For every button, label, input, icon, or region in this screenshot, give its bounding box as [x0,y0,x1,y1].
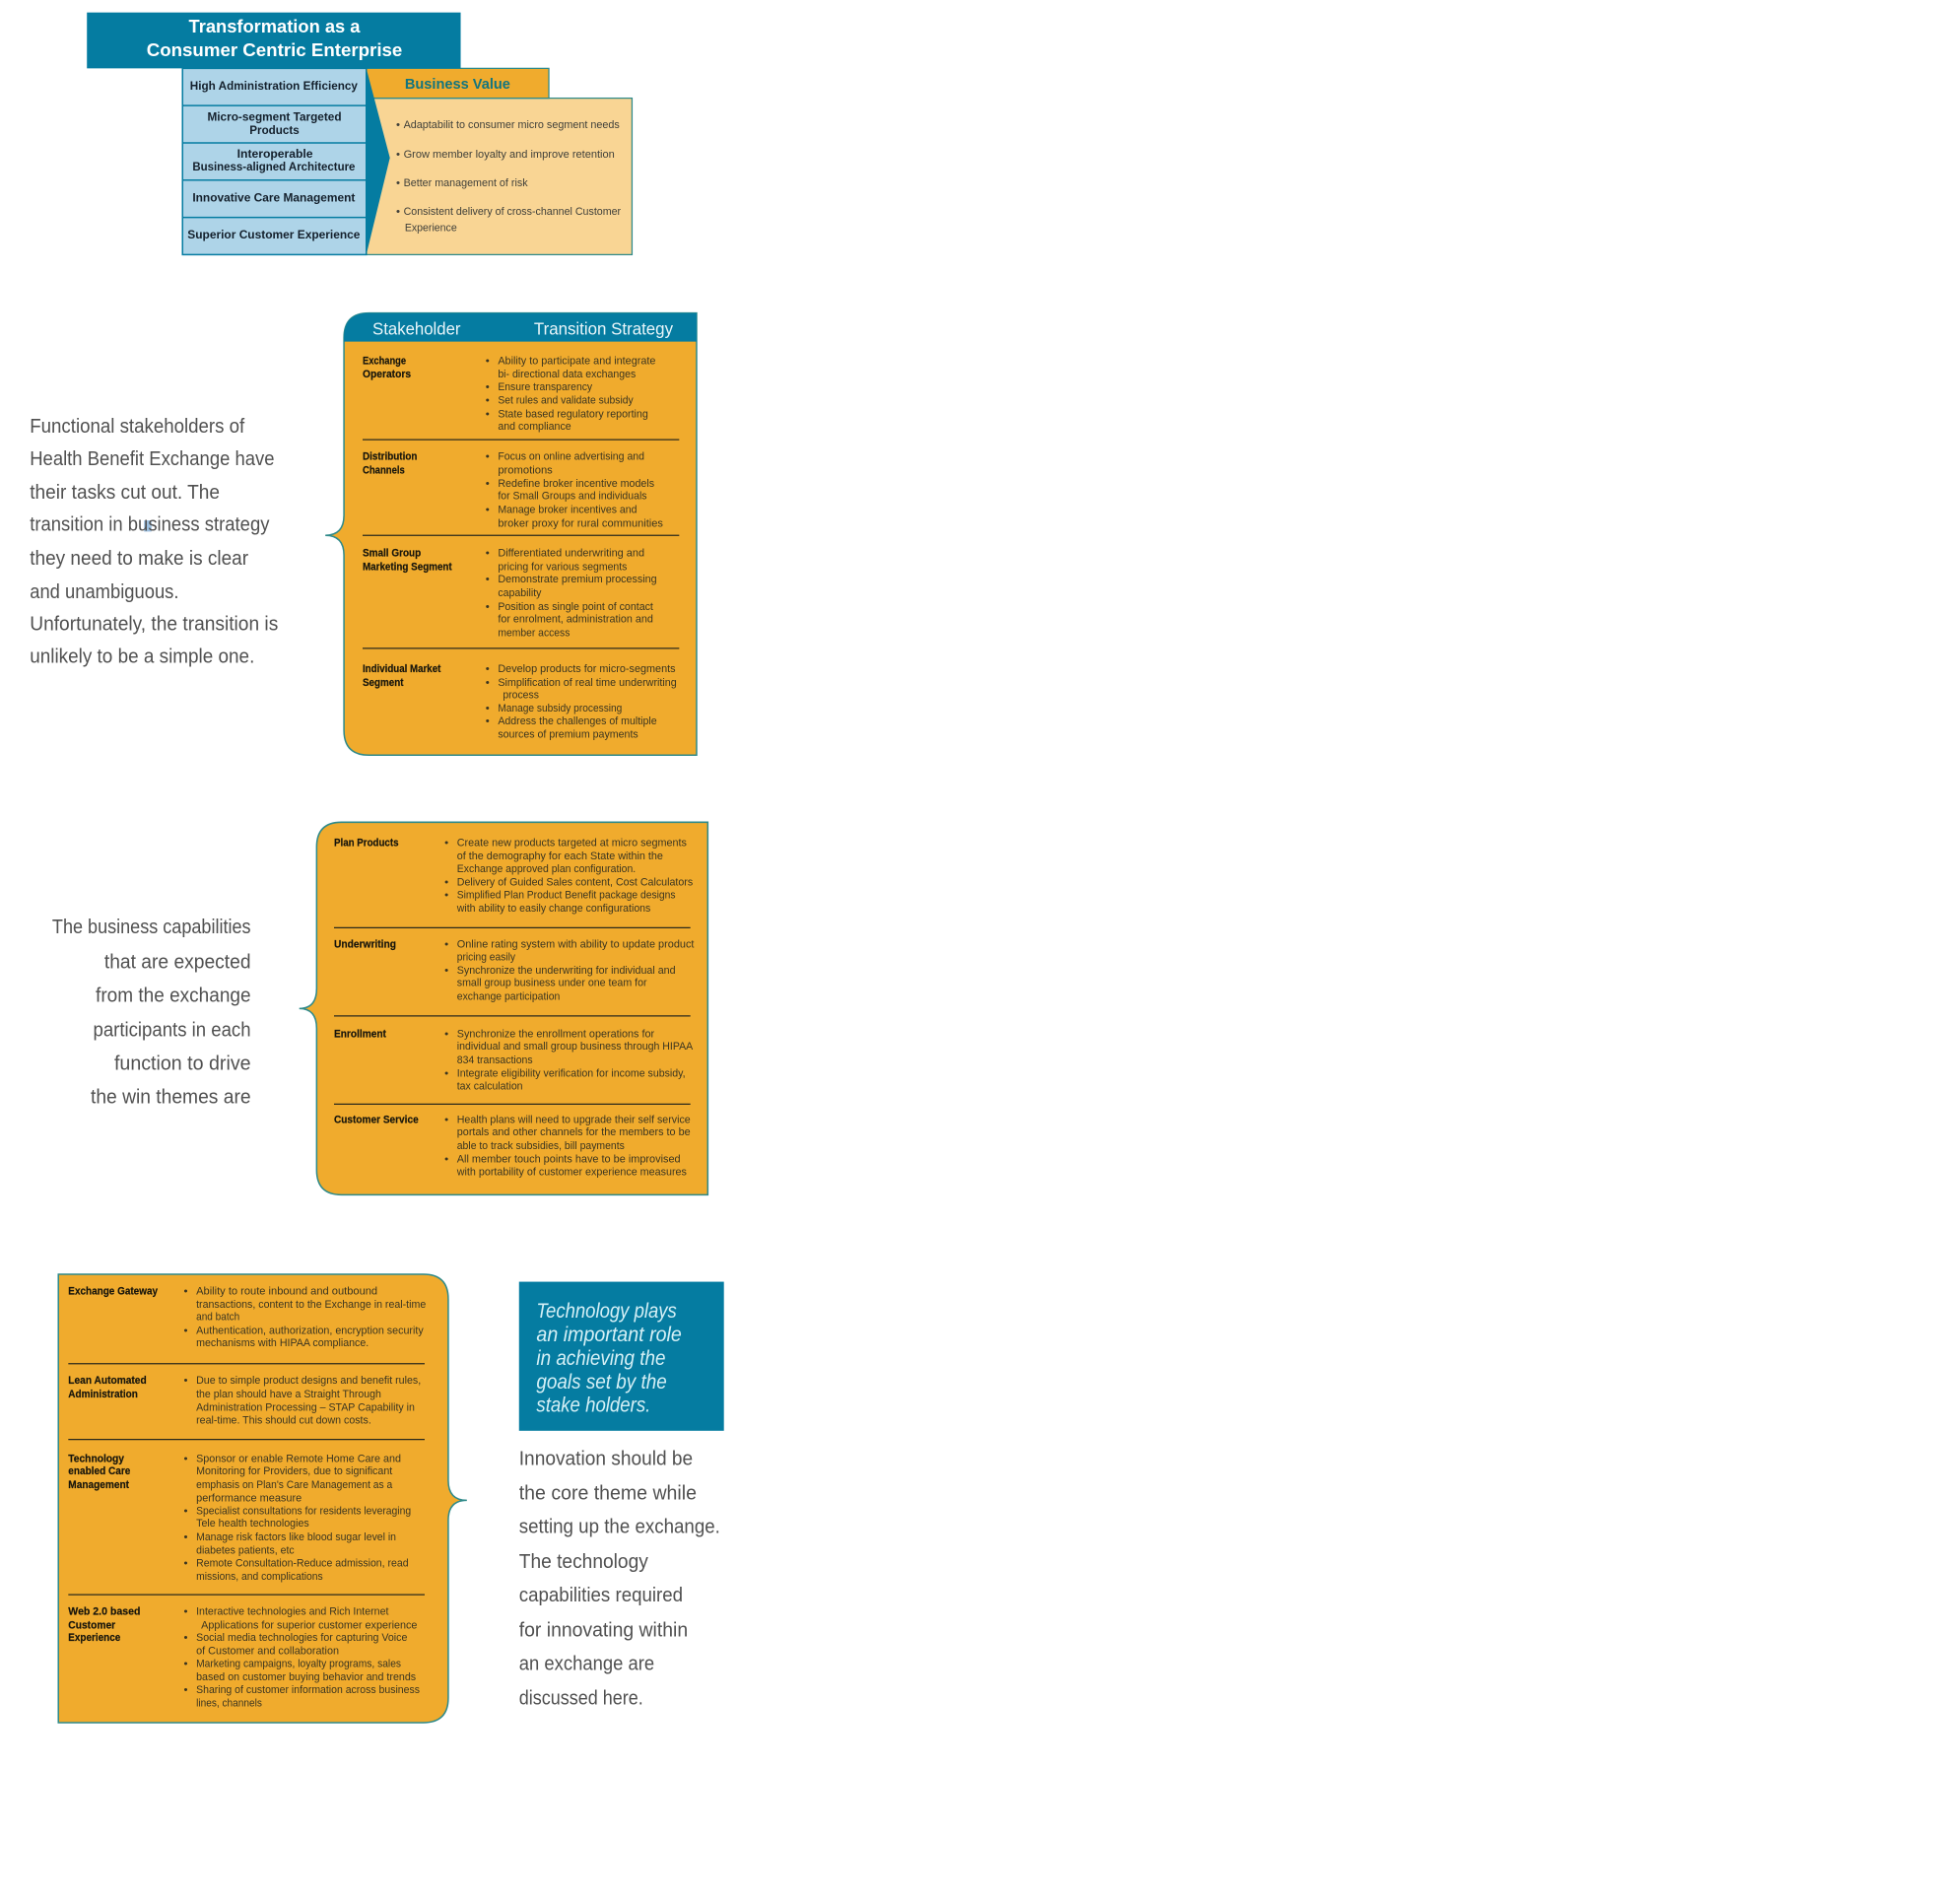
row: plan products: Plan Products [334,837,399,849]
row: technology enabled care management: • [184,1453,188,1464]
row: exchange gateway: Ability to route inbound and outbound [196,1285,377,1297]
row: underwriting: Online rating system with ability to update product [457,939,695,951]
callout: technology plays an important role [519,1282,724,1431]
row: web 2.0 based customer experience: of Customer and collaboration [196,1646,339,1658]
table header: Transition Strategy [534,319,673,339]
row: distribution channels: Channels [363,464,405,476]
row: lean automated administration: • [184,1375,188,1387]
panel: business capabilities by function [300,822,707,1194]
panel: business value content: Consistent delivery of cross-channel Customer [404,206,621,218]
heading: business value: Business Value [405,76,510,93]
arrow: capabilities to value [367,68,390,254]
row: small group marketing segment: • [486,574,490,585]
row: lean automated administration: Administration [68,1389,138,1400]
callout: technology plays an important role: Technology plays [536,1300,677,1323]
panel: technology capabilities [58,1274,467,1723]
row: individual market segment: • [486,677,490,689]
row: technology enabled care management: enabled Care [68,1465,130,1477]
panel: business value content: • [396,177,400,189]
row: small group marketing segment: capability [498,587,542,599]
row: lean automated administration [68,1375,421,1426]
row: web 2.0 based customer experience [68,1605,420,1710]
row: technology enabled care management: • [184,1505,188,1517]
row: plan products: • [444,889,448,901]
row: web 2.0 based customer experience: • [184,1605,188,1617]
row: enrollment: 834 transactions [457,1054,533,1066]
row: individual market segment: Individual Market [363,663,441,675]
row: plan products: Exchange approved plan configuration. [457,863,636,875]
row: technology enabled care management: • [184,1557,188,1569]
row: individual market segment: • [486,703,490,714]
row: small group marketing segment: Position as single point of contact [498,601,654,613]
row: exchange operators: Set rules and validate subsidy [498,395,634,407]
row: customer service: • [444,1154,448,1166]
row: customer service: able to track subsidies, bill payments [457,1140,625,1152]
row: small group marketing segment: Marketing Segment [363,562,452,574]
panel: business value content: Adaptabilit to consumer micro segment needs [404,119,620,131]
row: web 2.0 based customer experience: • [184,1632,188,1644]
row: enrollment: Integrate eligibility verification for income subsidy, [457,1068,686,1080]
panel: capability list: Superior Customer Experience [187,230,361,241]
row: exchange operators: bi- directional data exchanges [498,369,636,380]
row: distribution channels: for Small Groups and individuals [498,491,647,503]
text block: business capabilities [52,917,251,1109]
row: customer service: with portability of customer experience measures [456,1166,687,1178]
row: lean automated administration: real-time. This should cut down costs. [196,1414,371,1426]
panel: business value content: • [396,206,400,218]
text block: functional stakeholders: and unambiguous. [30,581,178,603]
title [87,13,461,68]
text block: business capabilities: the win themes are [91,1087,251,1109]
panel: business value content: Better management of risk [404,177,528,189]
row: customer service: Customer Service [334,1114,419,1125]
title: Transformation as a [189,17,361,37]
row: web 2.0 based customer experience: lines, channels [196,1698,262,1710]
row: enrollment: tax calculation [457,1080,523,1092]
row: underwriting: exchange participation [457,991,560,1003]
panel: capability list [182,68,367,254]
heading: business value [367,68,549,99]
row: plan products: Delivery of Guided Sales content, Cost Calculators [457,877,693,889]
row: technology enabled care management: Remote Consultation-Reduce admission, read [196,1557,409,1569]
panel: business value content: Experience [405,223,457,235]
table header: Stakeholder [372,319,461,339]
panel: capability list: Products [249,125,300,137]
row: web 2.0 based customer experience: Sharing of customer information across business [196,1684,420,1696]
row: small group marketing segment: Demonstrate premium processing [498,574,657,585]
row: customer service: Health plans will need to upgrade their self service [457,1114,691,1125]
row: exchange operators: and compliance [498,421,571,433]
row: individual market segment: • [486,663,490,675]
row: customer service: portals and other channels for the members to be [457,1126,691,1138]
row: plan products: of the demography for each State within the [457,850,663,862]
text block: functional stakeholders: unlikely to be a simple one. [30,646,254,667]
row: web 2.0 based customer experience: • [184,1684,188,1696]
row: distribution channels: Redefine broker incentive models [498,478,654,490]
panel: capability list: Innovative Care Management [192,192,356,204]
text block: innovation core theme: Innovation should be [519,1448,693,1469]
row: web 2.0 based customer experience: Social media technologies for capturing Voice [196,1632,407,1644]
row: distribution channels: • [486,478,490,490]
panel: business value content: • [396,149,400,161]
row: small group marketing segment: for enrolment, administration and [498,614,653,626]
row: small group marketing segment: • [486,601,490,613]
row: web 2.0 based customer experience: • [184,1658,188,1669]
row: underwriting: small group business under one team for [457,978,647,989]
row: small group marketing segment: • [486,548,490,560]
text block: functional stakeholders: Health Benefit Exchange have [30,448,275,470]
row: technology enabled care management: Manage risk factors like blood sugar level in [196,1531,396,1543]
row: exchange operators: • [486,395,490,407]
panel background with brace [325,313,697,755]
row: individual market segment: Segment [363,677,404,689]
text block: innovation core theme: discussed here. [519,1688,643,1710]
row: individual market segment [363,663,677,741]
row: technology enabled care management: Management [68,1479,129,1491]
row: technology enabled care management [68,1453,411,1583]
row: technology enabled care management: Specialist consultations for residents leveraging [196,1505,411,1517]
panel: capability list: Business-aligned Architecture [192,162,356,173]
row: exchange operators: Ability to participate and integrate [498,355,655,367]
text block: functional stakeholders: their tasks cut out. The [30,482,220,504]
row: enrollment: Enrollment [334,1028,386,1040]
row: lean automated administration: Due to simple product designs and benefit rules, [196,1375,421,1387]
row: small group marketing segment [363,548,657,639]
row: enrollment: individual and small group business through HIPAA [457,1041,694,1053]
row: web 2.0 based customer experience: Customer [68,1619,116,1631]
row: exchange operators: • [486,355,490,367]
row: underwriting: • [444,939,448,951]
row: distribution channels [363,450,663,529]
row: lean automated administration: Administration Processing – STAP Capability in [196,1402,415,1414]
row: plan products [334,837,693,915]
row: exchange gateway [68,1285,426,1349]
row: technology enabled care management: Monitoring for Providers, due to significant [196,1465,393,1477]
row: exchange gateway: Exchange Gateway [68,1285,159,1297]
row: individual market segment: process [503,689,539,701]
row: plan products: Create new products targeted at micro segments [457,837,687,849]
row: plan products: Simplified Plan Product Benefit package designs [457,889,676,901]
text block: innovation core theme: the core theme while [519,1483,697,1505]
text block: business capabilities: participants in each [94,1020,251,1042]
row: plan products: with ability to easily change configurations [456,903,651,915]
row: exchange gateway: Authentication, authorization, encryption security [196,1326,424,1337]
row: enrollment [334,1028,694,1092]
callout: technology plays an important role: goals set by the [536,1371,667,1394]
row: small group marketing segment: Small Group [363,548,421,560]
row: individual market segment: Simplification of real time underwriting [498,677,677,689]
callout: technology plays an important role: stake holders. [536,1394,650,1417]
row: small group marketing segment: Differentiated underwriting and [498,548,644,560]
diagram: consumer centric enterprise [87,13,632,254]
row: exchange operators: • [486,381,490,393]
row: enrollment: • [444,1028,448,1040]
row: technology enabled care management: Sponsor or enable Remote Home Care and [196,1453,401,1464]
row: web 2.0 based customer experience: Web 2.0 based [68,1605,140,1617]
row: distribution channels: Manage broker incentives and [498,505,637,516]
row: distribution channels: • [486,450,490,462]
row: exchange operators: State based regulatory reporting [498,409,648,421]
row: exchange gateway: • [184,1326,188,1337]
row: technology enabled care management: emphasis on Plan's Care Management as a [196,1479,393,1491]
row: underwriting: Synchronize the underwriting for individual and [457,965,676,977]
text block: business capabilities: that are expected [104,951,251,973]
row: technology enabled care management: performance measure [196,1493,302,1505]
row: web 2.0 based customer experience: Interactive technologies and Rich Internet [196,1605,389,1617]
row: underwriting [334,939,695,1003]
row: web 2.0 based customer experience: Marketing campaigns, loyalty programs, sales [196,1658,401,1669]
row: distribution channels: Distribution [363,450,417,462]
callout: technology plays an important role: in achieving the [536,1347,665,1370]
row: technology enabled care management: Technology [68,1453,125,1464]
row: underwriting: Underwriting [334,939,396,951]
text block: business capabilities: function to drive [114,1054,251,1075]
row: individual market segment: • [486,715,490,727]
row: customer service: All member touch points have to be improvised [457,1154,681,1166]
row: exchange gateway: transactions, content to the Exchange in real-time [196,1299,426,1311]
table header [344,313,697,342]
row: technology enabled care management: diabetes patients, etc [196,1545,295,1557]
row: exchange gateway: and batch [196,1312,239,1324]
row: individual market segment: Address the challenges of multiple [498,715,657,727]
row: lean automated administration: the plan should have a Straight Through [196,1389,381,1400]
row: technology enabled care management: missions, and complications [196,1571,323,1583]
row: plan products: • [444,877,448,889]
row: exchange operators: Exchange [363,355,406,367]
row: web 2.0 based customer experience: Applications for superior customer experience [201,1619,417,1631]
row: plan products: • [444,837,448,849]
panel: capability list: Micro-segment Targeted [207,111,342,123]
row: exchange operators: • [486,409,490,421]
row: exchange gateway: • [184,1285,188,1297]
title: Consumer Centric Enterprise [147,40,402,61]
panel background with brace [300,822,707,1194]
panel: business value content: • [396,119,400,131]
text block: innovation core theme: for innovating within [519,1619,688,1641]
row: small group marketing segment: member access [498,627,571,639]
row: distribution channels: broker proxy for rural communities [498,517,663,529]
row: exchange operators: Operators [363,369,411,380]
text block: innovation core theme: an exchange are [519,1653,654,1674]
row: customer service [334,1114,691,1178]
row: distribution channels: • [486,505,490,516]
text block: innovation core theme: capabilities required [519,1585,683,1606]
panel: business value content [367,99,632,254]
row: technology enabled care management: • [184,1531,188,1543]
row: exchange operators [363,355,655,433]
row: exchange gateway: mechanisms with HIPAA compliance. [196,1337,369,1349]
panel: capability list: Interoperable [237,149,313,161]
text block: innovation core theme: The technology [519,1551,649,1573]
text block: functional stakeholders: Unfortunately, the transition is [30,614,278,636]
row: customer service: • [444,1114,448,1125]
row: web 2.0 based customer experience: based on customer buying behavior and trends [196,1671,416,1683]
text block: functional stakeholders: Functional stakeholders of [30,416,245,438]
text block: business capabilities: The business capabilities [52,917,251,938]
row: individual market segment: Manage subsidy processing [498,703,622,714]
text block: innovation core theme: setting up the exchange. [519,1517,720,1538]
text block: innovation core theme [519,1448,720,1710]
text block: functional stakeholders [30,416,278,667]
row: lean automated administration: Lean Automated [68,1375,147,1387]
panel: capability list: High Administration Efficiency [190,81,358,93]
row: underwriting: pricing easily [457,951,515,963]
row: web 2.0 based customer experience: Experience [68,1632,120,1644]
row: individual market segment: Develop products for micro-segments [498,663,676,675]
row: exchange operators: Ensure transparency [498,381,592,393]
row: enrollment: • [444,1068,448,1080]
row: enrollment: Synchronize the enrollment operations for [457,1028,654,1040]
panel background with brace [58,1274,467,1723]
row: distribution channels: promotions [498,464,553,476]
panel: stakeholder transition strategy [325,313,697,755]
row: underwriting: • [444,965,448,977]
panel: business value content: Grow member loyalty and improve retention [404,149,615,161]
row: distribution channels: Focus on online advertising and [498,450,644,462]
text block: business capabilities: from the exchange [96,985,251,1006]
callout: technology plays an important role: an important role [536,1324,682,1346]
text block: functional stakeholders: they need to make is clear [30,548,248,570]
text block: functional stakeholders: transition in business strategy [30,514,270,536]
row: small group marketing segment: pricing for various segments [498,562,628,574]
row: technology enabled care management: Tele health technologies [196,1518,309,1530]
row: individual market segment: sources of premium payments [498,729,638,741]
